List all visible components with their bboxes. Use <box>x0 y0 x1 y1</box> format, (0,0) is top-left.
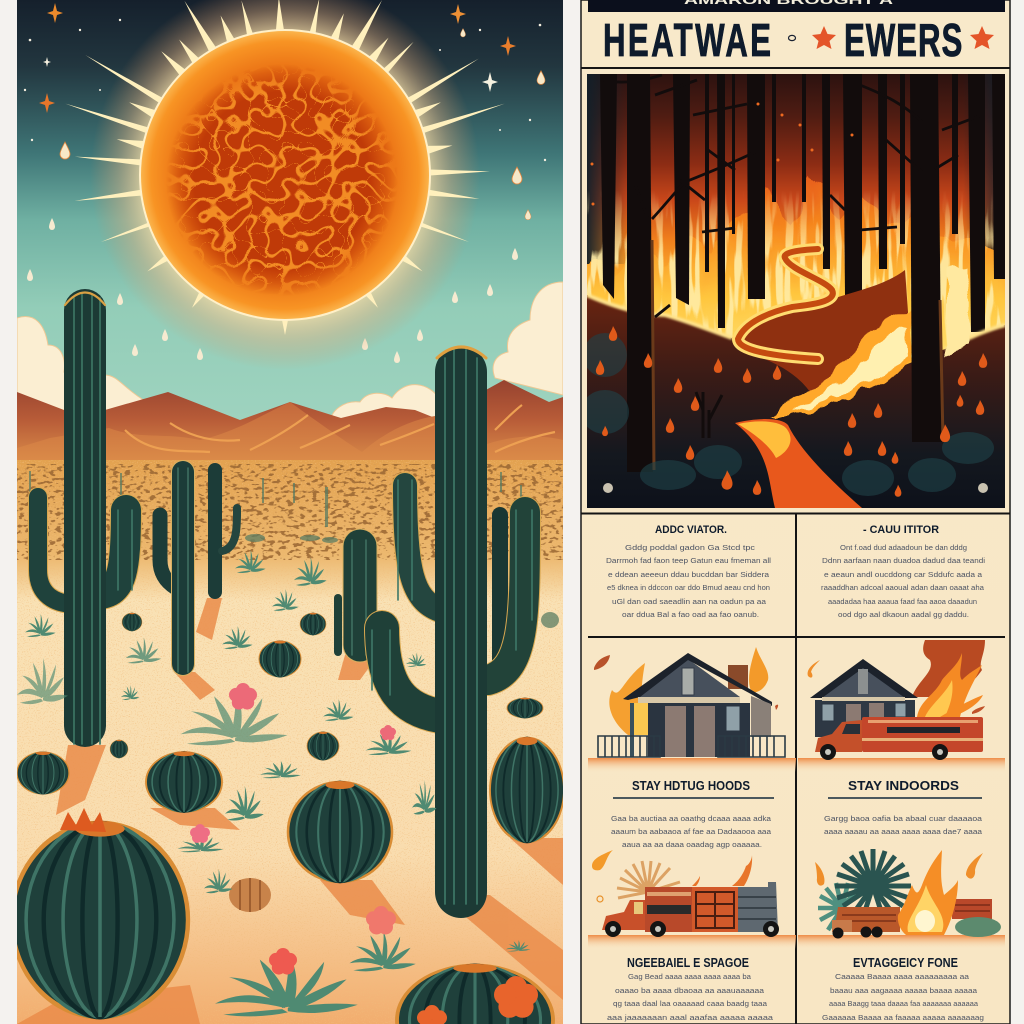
foreground trunks <box>627 74 942 472</box>
text block: emergency zone: Gaaaaaa Baaaa aa faaaaa aaaaa aaaaaaag <box>822 1013 984 1022</box>
clouds <box>17 282 563 430</box>
text block: advisory left: e5 dknea in ddccon oar ddo Bmud aeau cnd hon <box>607 583 770 592</box>
illustration: burning house right with fire truck <box>798 640 1005 772</box>
text block: emergency zone: aaaa Baagg taaa daaaa faa aaaaaaa aaaaaa <box>829 999 979 1008</box>
text block: defensible space: NGEEBAIEL E SPAGOE <box>627 955 749 970</box>
text block: defensible space: aaa jaaaaaaan aaal aaafaa aaaaa aaaaa <box>607 1013 774 1022</box>
illustration: fire truck left <box>588 850 796 949</box>
text block: emergency zone: Caaaaa Baaaa aaaa aaaaaaaaa aa <box>835 972 970 981</box>
text block: advisory right: Ont f.oad dud adaadoun be dan dddg <box>840 543 967 552</box>
desert flowers <box>190 683 538 1024</box>
mountains <box>17 380 563 460</box>
text block: advisory left: uGl dan oad saeadlin aan na oadun pa aa <box>612 597 767 606</box>
saguaro cactus: left <box>38 292 132 744</box>
agave plants <box>17 550 530 1016</box>
cactus shadows <box>17 598 563 1024</box>
saguaro cactus: distant group <box>160 468 366 672</box>
text block: stay right: Gargg baoa oafia ba abaal cuar daaaaoa <box>824 814 983 823</box>
panel: desert illustration <box>12 0 564 1024</box>
winding fire path <box>738 249 833 359</box>
trees <box>600 74 1005 332</box>
text block: advisory left: Darrmoh fad faon teep Gatun eau fmeman all <box>606 556 771 565</box>
burning hillside <box>587 295 1005 508</box>
text block: advisory right: - CAUU ITITOR <box>863 524 939 536</box>
illustration: burning house left <box>588 647 796 772</box>
saguaro cactus: right <box>372 347 532 904</box>
small charred tree <box>696 392 722 438</box>
sand speckle <box>17 460 563 948</box>
text block: stay right <box>824 778 983 836</box>
text block: stay left: aaua aa aa daaa oaadag agp oaaaaa. <box>622 840 762 849</box>
text block: stay left <box>611 778 774 849</box>
panel: right poster <box>575 0 1015 1024</box>
distant scrub specks <box>17 464 563 560</box>
text block: stay right: aaaa aaaau aa aaaa aaaa aaaa dae7 aaaa <box>824 827 983 836</box>
top banner <box>588 0 1005 12</box>
text block: defensible space: qg taaa daal laa oaaaaad caaa baadg taaa <box>613 999 768 1008</box>
text block: defensible space: Gag Bead aaaa aaaa aaaa aaaa ba <box>628 972 752 981</box>
text block: advisory left: oar ddua Bal a fao oad aa fao oanub. <box>622 610 759 619</box>
title: EWERS <box>844 15 962 67</box>
flame wall <box>575 180 1015 360</box>
text block: advisory right: e aeaun andl oucddong car Sddufc aada a <box>824 570 983 579</box>
sun <box>64 0 506 370</box>
text block: stay left: Gaa ba auctiaa aa oaathg dcaaa aaaa adka <box>611 814 772 823</box>
title: HEATWAE <box>603 15 771 67</box>
text block: emergency zone: baaau aaa aagaaaa aaaaa baaaa aaaaa <box>830 986 978 995</box>
sparks <box>590 102 854 206</box>
raised inner hill <box>732 270 908 400</box>
text block: emergency zone <box>822 955 984 1022</box>
text block: advisory right: Ddnn aarfaan naan duadoa dadud daa teandi <box>822 556 985 565</box>
stars and sweat drops <box>24 3 546 363</box>
mid shrubs <box>29 471 559 628</box>
text block: stay left: STAY HDTUG HOODS <box>632 778 750 793</box>
flame streaks <box>587 193 1001 346</box>
wildfire illustration <box>575 74 1015 508</box>
sky <box>17 0 563 440</box>
text block: defensible space <box>607 955 774 1022</box>
embers on the ground <box>596 326 987 497</box>
small rust barrel <box>229 878 271 912</box>
title <box>603 15 994 67</box>
text block: emergency zone: EVTAGGEICY FONE <box>853 955 958 970</box>
text block: defensible space: oaaao ba aaaa dbaoaa aa aaauaaaaaa <box>615 986 765 995</box>
text block: advisory right: ood dgo aal dkaoun aadal gg daddu. <box>838 610 969 619</box>
text block: advisory left: e ddean aeeeun ddau bucddan bar Siddera <box>608 570 770 579</box>
rivets <box>603 483 988 493</box>
main flame <box>770 265 968 414</box>
text block: stay left: aaaum ba aabaaoa af fae aa Dadaaooa aaa <box>611 827 772 836</box>
text block: advisory left <box>606 524 771 619</box>
barrel cacti <box>12 613 564 1024</box>
text block: advisory right: raaaddhan adcoal aaoual adan daan oaaat aha <box>821 583 985 592</box>
text block: advisory right: aaadadaa haa aaaua faad faa aaoa daaadun <box>828 597 977 606</box>
text block: stay right: STAY INDOORDS <box>848 778 959 793</box>
text block: advisory left: ADDC VIATOR. <box>655 524 727 536</box>
desert ground <box>17 460 563 1024</box>
crown spikes on large barrel <box>60 808 106 832</box>
ridge glow <box>587 295 1005 349</box>
teal bushes <box>581 333 994 496</box>
river of fire <box>735 419 862 508</box>
dividers <box>581 513 1010 1024</box>
text block: advisory right <box>821 524 985 619</box>
illustration: palm and fire truck right <box>798 849 1005 949</box>
trunk highlights <box>652 240 943 470</box>
tree branches <box>603 75 982 317</box>
text block: advisory left: Gddg poddal gadon Ga Stcd tpc <box>625 543 755 552</box>
